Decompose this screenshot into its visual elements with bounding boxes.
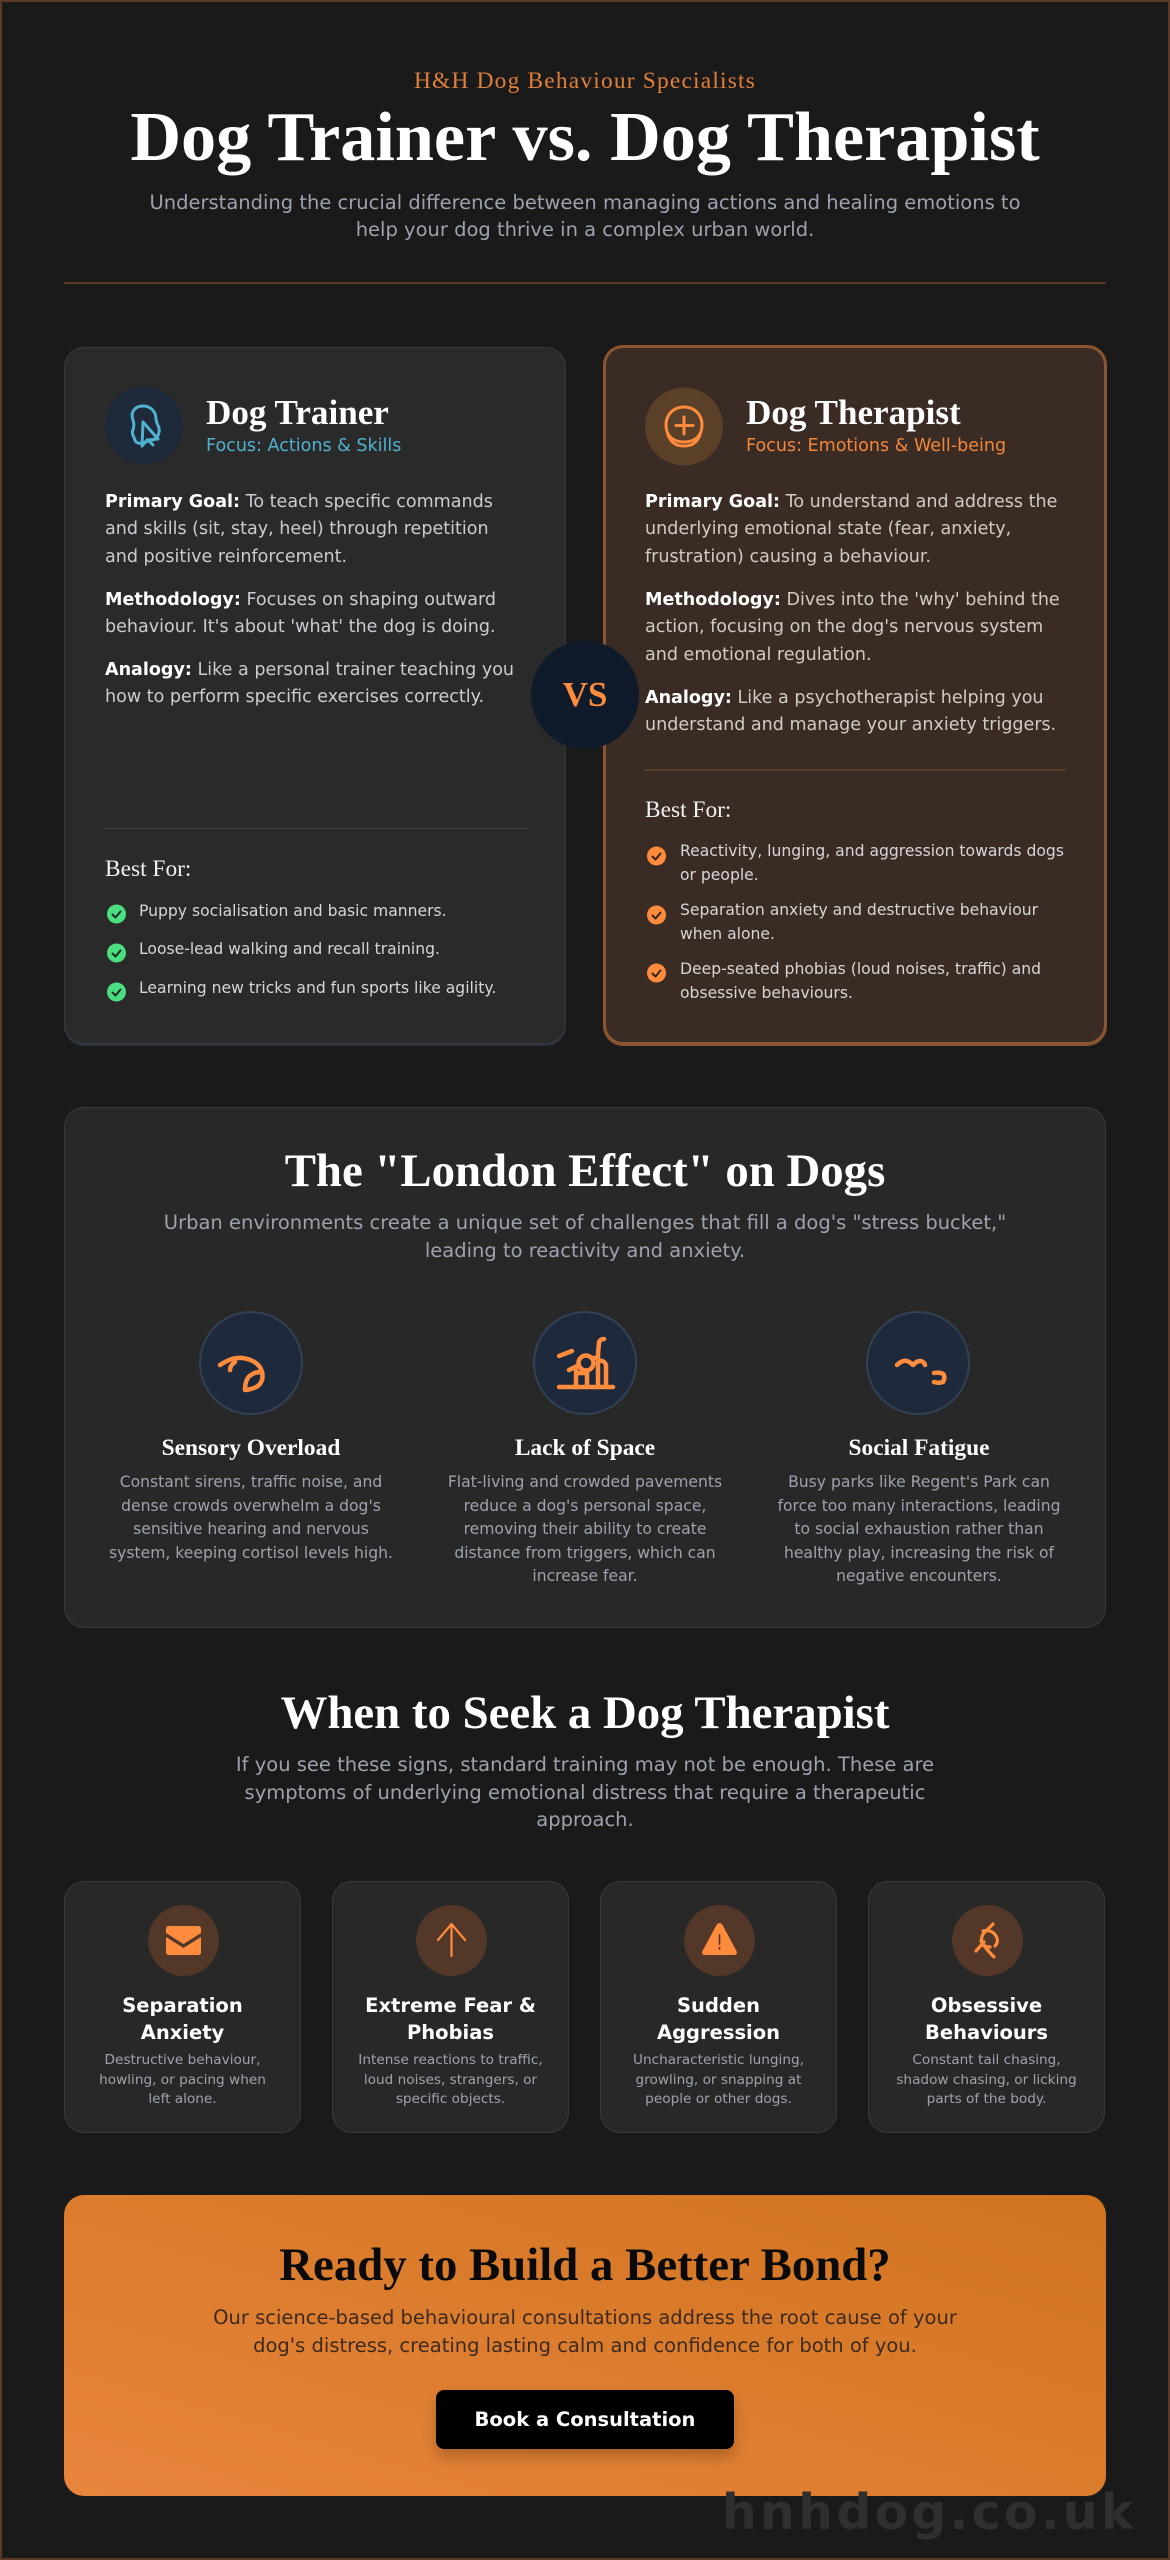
icon: check — [107, 904, 126, 924]
intro text: approach. — [536, 1808, 634, 1831]
name: Anxiety — [141, 2021, 224, 2044]
icon: arrow up — [416, 1905, 487, 1976]
name: Behaviours — [925, 2021, 1048, 2044]
icon: sensory overload — [199, 1311, 303, 1415]
card: obsessive behaviours — [868, 1881, 1105, 2133]
card: separation anxiety — [64, 1881, 301, 2133]
description: left alone. — [148, 2091, 217, 2107]
body text: dog's distress, creating lasting calm and confidence for both of you. — [253, 2334, 917, 2357]
heading: The "London Effect" on Dogs — [285, 1145, 885, 1197]
description — [358, 2052, 543, 2107]
description: sensitive hearing and nervous — [133, 1520, 369, 1538]
item — [680, 901, 1038, 943]
description: loud noises, strangers, or — [364, 2072, 537, 2088]
description: parts of the body. — [927, 2091, 1046, 2107]
item — [680, 842, 1064, 884]
watermark: hnhdog.co.uk — [722, 2485, 1137, 2541]
description — [868, 2051, 1105, 2110]
intro text: Urban environments create a unique set of challenges that fill a dog's "stress bucket," — [164, 1211, 1006, 1234]
analogy — [645, 688, 1056, 735]
methodology — [105, 590, 496, 637]
body text: Our science-based behavioural consultations address the root cause of your — [213, 2306, 957, 2329]
description — [777, 1473, 1061, 1585]
description: Constant sirens, traffic noise, and — [120, 1473, 382, 1491]
focus label: Focus: Actions & Skills — [206, 436, 401, 456]
item: Separation anxiety and destructive behaviour — [680, 901, 1038, 919]
icon: social fatigue — [866, 1311, 970, 1415]
name: Extreme Fear & — [365, 1994, 536, 2017]
list: best for trainer — [107, 902, 496, 1002]
description: Destructive behaviour, — [105, 2052, 260, 2068]
best for heading: Best For: — [105, 856, 191, 882]
icon: looping arrows — [952, 1905, 1023, 1976]
description: people or other dogs. — [645, 2091, 792, 2107]
intro text: symptoms of underlying emotional distress that require a therapeutic — [245, 1781, 925, 1804]
description: shadow chasing, or licking — [896, 2072, 1077, 2088]
description: specific objects. — [396, 2091, 505, 2107]
description: Intense reactions to traffic, — [358, 2052, 543, 2068]
description: force too many interactions, leading — [777, 1497, 1061, 1515]
eyebrow: H&H Dog Behaviour Specialists — [414, 68, 756, 94]
icon: check — [647, 964, 666, 982]
description: Uncharacteristic lunging, — [633, 2052, 804, 2068]
panel: dog therapist — [603, 345, 1107, 1045]
panel: london effect — [64, 1107, 1106, 1628]
description: system, keeping cortisol levels high. — [109, 1544, 393, 1562]
name: Sensory Overload — [162, 1435, 340, 1461]
description — [109, 1473, 393, 1562]
icon: trainer head — [105, 386, 183, 464]
icon: warning — [684, 1905, 755, 1976]
vs badge: VS — [563, 675, 607, 714]
name — [122, 1994, 243, 2044]
analogy: understand and manage your anxiety triggers. — [645, 715, 1056, 735]
list: best for therapist — [647, 842, 1064, 1002]
primary goal — [645, 492, 1057, 567]
panel: call to action — [64, 2195, 1106, 2496]
focus label: Focus: Emotions & Well-being — [746, 436, 1006, 456]
intro text: leading to reactivity and anxiety. — [425, 1239, 745, 1262]
item — [680, 960, 1041, 1002]
subtitle: Understanding the crucial difference between managing actions and healing emotions to — [149, 191, 1021, 214]
methodology: Methodology: Focuses on shaping outward — [105, 590, 496, 610]
item: Reactivity, lunging, and aggression towards dogs — [680, 842, 1064, 860]
methodology: action, focusing on the dog's nervous system — [645, 617, 1043, 637]
description: to social exhaustion rather than — [794, 1520, 1044, 1538]
description: healthy play, increasing the risk of — [784, 1544, 1054, 1562]
primary goal: and skills (sit, stay, heel) through repetition — [105, 519, 489, 539]
icon: therapist head — [645, 388, 723, 466]
description: Constant tail chasing, — [912, 2052, 1061, 2068]
description — [600, 2051, 837, 2110]
icon: check — [107, 944, 126, 962]
body text — [64, 2304, 1106, 2359]
description: Busy parks like Regent's Park can — [788, 1473, 1050, 1491]
heading: Dog Therapist — [746, 393, 961, 432]
description: distance from triggers, which can — [454, 1544, 716, 1562]
intro text — [164, 1211, 1006, 1262]
intro text: If you see these signs, standard training may not be enough. These are — [236, 1753, 934, 1776]
icon: check — [647, 906, 666, 924]
primary goal — [105, 492, 493, 567]
name: Separation — [122, 1994, 243, 2017]
best for heading: Best For: — [645, 797, 731, 823]
methodology — [645, 590, 1060, 665]
name — [365, 1994, 536, 2044]
item: Deep-seated phobias (loud noises, traffic) and — [680, 960, 1041, 978]
primary goal: frustration) causing a behaviour. — [645, 547, 931, 567]
description: negative encounters. — [836, 1567, 1002, 1585]
header divider — [64, 282, 1106, 284]
analogy: Analogy: Like a psychotherapist helping you — [645, 688, 1044, 708]
analogy — [105, 660, 514, 707]
section heading: when to seek — [236, 1687, 934, 1831]
heading: When to Seek a Dog Therapist — [281, 1687, 889, 1739]
title: Dog Trainer vs. Dog Therapist — [130, 98, 1040, 176]
description: removing their ability to create — [464, 1520, 706, 1538]
icon: check — [107, 982, 126, 1002]
name: Obsessive — [931, 1994, 1042, 2017]
header — [130, 68, 1040, 241]
intro text — [236, 1753, 934, 1831]
item: Loose-lead walking and recall training. — [139, 940, 440, 958]
subtitle — [149, 191, 1021, 241]
column: lack of space — [448, 1311, 722, 1585]
column: social fatigue — [777, 1311, 1061, 1585]
name: Social Fatigue — [848, 1435, 989, 1461]
subtitle: help your dog thrive in a complex urban world. — [356, 218, 814, 241]
description: Flat-living and crowded pavements — [448, 1473, 722, 1491]
name: Lack of Space — [515, 1435, 655, 1461]
item: or people. — [680, 866, 759, 884]
methodology: and emotional regulation. — [645, 645, 872, 665]
name: Aggression — [657, 2021, 780, 2044]
description — [99, 2052, 266, 2107]
description: reduce a dog's personal space, — [464, 1497, 706, 1515]
name — [600, 1992, 837, 2046]
description: howling, or pacing when — [99, 2072, 266, 2088]
primary goal: underlying emotional state (fear, anxiety, — [645, 519, 1011, 539]
description — [448, 1473, 722, 1585]
analogy: Analogy: Like a personal trainer teaching you — [105, 660, 514, 680]
primary goal: Primary Goal: To understand and address the — [645, 492, 1057, 512]
item: Learning new tricks and fun sports like agility. — [139, 979, 496, 997]
methodology: Methodology: Dives into the 'why' behind the — [645, 590, 1060, 610]
card: extreme fear — [332, 1881, 569, 2133]
heading: Dog Trainer — [206, 393, 389, 432]
primary goal: and positive reinforcement. — [105, 547, 347, 567]
analogy: how to perform specific exercises correctly. — [105, 687, 484, 707]
name — [868, 1992, 1105, 2046]
card: sudden aggression — [600, 1881, 837, 2133]
item: when alone. — [680, 925, 775, 943]
button: Book a Consultation — [475, 2408, 695, 2431]
panel: dog trainer — [64, 347, 566, 1044]
heading: Ready to Build a Better Bond? — [279, 2239, 891, 2291]
name: Phobias — [407, 2021, 494, 2044]
item: Puppy socialisation and basic manners. — [139, 902, 447, 920]
button — [436, 2390, 734, 2449]
icon: check — [647, 846, 666, 866]
description: increase fear. — [532, 1567, 638, 1585]
name: Sudden — [677, 1994, 760, 2017]
description: growling, or snapping at — [636, 2072, 801, 2088]
icon: envelope — [148, 1905, 219, 1976]
methodology: behaviour. It's about 'what' the dog is doing. — [105, 617, 496, 637]
item: obsessive behaviours. — [680, 984, 853, 1002]
column: sensory overload — [109, 1311, 393, 1562]
primary goal: Primary Goal: To teach specific commands — [105, 492, 493, 512]
description: dense crowds overwhelm a dog's — [121, 1497, 381, 1515]
icon: lack of space — [533, 1311, 637, 1415]
vs badge — [531, 641, 639, 749]
